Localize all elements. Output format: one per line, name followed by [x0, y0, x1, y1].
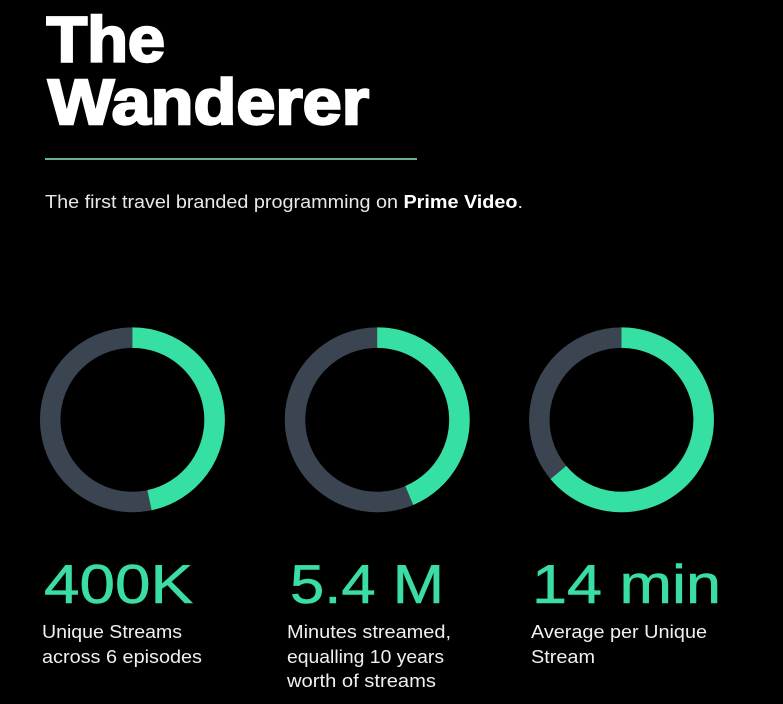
stat description: Unique Streams: [42, 622, 182, 642]
stat description: worth of streams: [286, 671, 436, 691]
stat description: across 6 episodes: [42, 647, 202, 667]
stat value: 400K: [44, 553, 193, 615]
stat description: [286, 622, 451, 691]
stat value: 5.4 M: [290, 553, 444, 615]
stat value: 14 min: [532, 553, 721, 615]
stat description: [531, 622, 707, 667]
title: [46, 4, 369, 138]
subtitle: The first travel branded programming on Prime Video .: [45, 192, 523, 212]
stat: 14 min: [531, 553, 721, 667]
stat description: Minutes streamed,: [287, 622, 451, 642]
stat description: Stream: [531, 647, 595, 667]
donut chart: 14 min: [539, 338, 704, 502]
divider rule: [45, 158, 417, 160]
title: Wanderer: [48, 66, 369, 138]
title: The: [46, 4, 165, 76]
stat description: [42, 622, 202, 667]
donut chart: 400K: [50, 338, 215, 502]
stat description: Average per Unique: [531, 622, 707, 642]
donut chart: 5.4 M: [295, 338, 459, 502]
stat description: equalling 10 years: [287, 647, 444, 667]
stat: 400K: [42, 553, 202, 667]
stat: 5.4 M: [286, 553, 451, 691]
